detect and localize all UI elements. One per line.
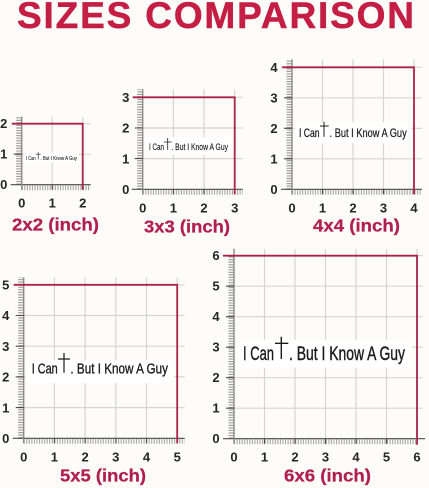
x axis numbers: 4	[143, 449, 151, 464]
size outline	[223, 256, 417, 445]
x axis numbers	[288, 200, 418, 215]
sticker: I Can't	[236, 337, 412, 368]
sticker: I Can't	[295, 122, 411, 143]
sticker: I Can't: I Can	[299, 126, 320, 140]
x axis numbers: 0	[230, 450, 238, 465]
sticker: I Can't: I Can	[149, 142, 164, 153]
x axis numbers: 2	[79, 196, 86, 211]
y axis numbers: 3	[212, 340, 220, 355]
panel: 6x6 size chart	[212, 248, 425, 465]
sticker: I Can't	[26, 353, 174, 383]
y axis numbers: 0	[0, 177, 7, 192]
x axis numbers: 3	[112, 449, 119, 464]
label: 2x2 (inch): 2x2 (inch)	[12, 215, 99, 235]
y axis numbers: 3	[2, 339, 9, 354]
x axis numbers: 0	[20, 449, 27, 464]
y axis numbers: 5	[212, 279, 220, 294]
x axis numbers: 4	[352, 450, 360, 465]
y axis numbers: 1	[212, 401, 220, 416]
x axis numbers: 4	[410, 200, 418, 215]
panel: 5x5 size chart	[2, 277, 185, 464]
x axis numbers: 1	[261, 450, 268, 465]
x axis numbers: 1	[49, 196, 56, 211]
y axis numbers: 6	[212, 248, 220, 263]
x axis numbers: 2	[349, 200, 357, 215]
sticker: I Can't: . But I Know A Guy	[171, 142, 228, 153]
y axis numbers: 0	[270, 182, 278, 197]
sticker: I Can't: I Can	[32, 360, 58, 377]
label: 6x6 (inch): 6x6 (inch)	[284, 466, 371, 486]
panel: 3x3 size chart	[122, 89, 243, 215]
y axis numbers: 1	[270, 151, 278, 166]
y axis numbers: 2	[212, 370, 220, 385]
x axis numbers: 2	[81, 449, 89, 464]
y axis numbers: 4	[212, 309, 220, 324]
x axis numbers: 2	[291, 450, 299, 465]
y axis numbers	[270, 60, 278, 197]
y axis numbers: 2	[2, 369, 9, 384]
y axis numbers: 1	[122, 151, 129, 166]
y axis numbers: 3	[270, 90, 278, 105]
size outline	[282, 67, 414, 194]
x axis numbers	[230, 450, 421, 465]
y axis numbers	[2, 277, 10, 446]
x axis numbers: 5	[383, 450, 390, 465]
label: 5x5 (inch): 5x5 (inch)	[60, 466, 146, 486]
sticker: I Can't: . But I Know A Guy	[40, 156, 77, 162]
size outline	[133, 97, 235, 194]
y axis numbers: 1	[2, 400, 9, 415]
y axis numbers: 3	[122, 90, 129, 105]
y axis numbers: 0	[122, 182, 129, 197]
sticker: I Can't	[146, 137, 231, 155]
y axis numbers: 4	[2, 308, 10, 323]
x axis numbers: 0	[18, 196, 25, 211]
sticker: I Can't	[24, 152, 79, 163]
sticker: I Can't: . But I Know A Guy	[70, 360, 168, 377]
sticker: I Can't: I Can	[26, 156, 36, 162]
x axis numbers: 3	[231, 200, 238, 215]
x axis numbers: 1	[170, 200, 177, 215]
y axis numbers	[122, 90, 129, 197]
x axis numbers	[20, 449, 181, 464]
label: 4x4 (inch): 4x4 (inch)	[313, 216, 400, 236]
x axis numbers: 3	[380, 200, 387, 215]
x axis numbers: 6	[413, 450, 421, 465]
y axis numbers	[0, 116, 7, 192]
y axis numbers: 0	[2, 431, 9, 446]
x axis numbers	[18, 196, 86, 211]
x axis numbers: 3	[322, 450, 329, 465]
label: 3x3 (inch): 3x3 (inch)	[144, 217, 230, 237]
y axis numbers: 2	[0, 116, 7, 131]
y axis numbers	[212, 248, 220, 446]
size outline	[14, 285, 177, 443]
x axis numbers: 2	[200, 200, 208, 215]
y axis numbers: 5	[2, 277, 9, 292]
y axis numbers: 4	[270, 60, 278, 75]
y axis numbers: 2	[270, 121, 278, 136]
sticker: I Can't: . But I Know A Guy	[330, 126, 407, 140]
y axis numbers: 1	[0, 147, 7, 162]
x axis numbers: 1	[51, 449, 58, 464]
x axis numbers: 0	[139, 200, 146, 215]
x axis numbers: 0	[288, 200, 296, 215]
panel: 2x2 size chart	[0, 116, 91, 211]
x axis numbers	[139, 200, 238, 215]
y axis numbers: 2	[122, 120, 129, 135]
panel: 4x4 size chart	[270, 59, 422, 215]
sticker: I Can't: I Can	[243, 344, 274, 365]
x axis numbers: 5	[174, 449, 181, 464]
size outline	[12, 124, 83, 190]
y axis numbers: 0	[212, 431, 220, 446]
x axis numbers: 1	[319, 200, 326, 215]
